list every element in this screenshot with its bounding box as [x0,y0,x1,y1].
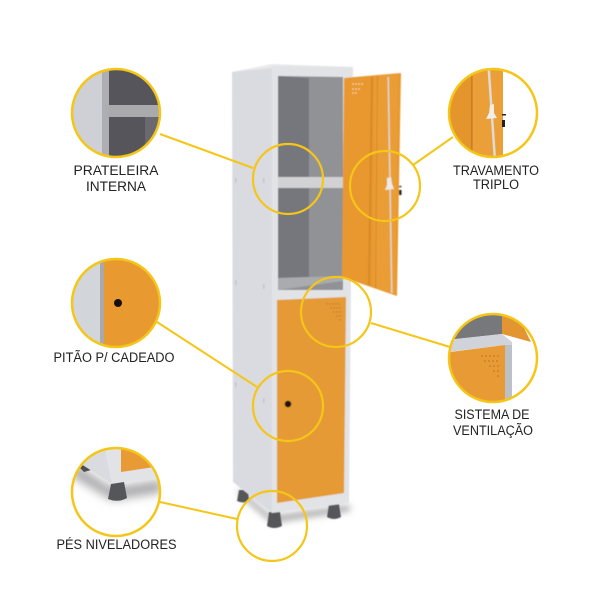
callout: pés niveladores [56,446,307,561]
side fastener marks [235,178,264,403]
label: SISTEMA DE [454,407,530,422]
cabinet top [232,64,353,76]
detail circle: shelf [73,70,159,156]
infographic canvas [54,64,538,562]
callout: prateleira interna [70,67,323,214]
marker circle on lock [350,151,420,221]
door vents [352,83,363,94]
label: PITÃO P/ CADEADO [54,350,174,365]
locker illustration [232,64,402,528]
open upper door [342,73,402,296]
lock tab [399,186,402,195]
marker circle on padlock hole [253,371,323,441]
padlock hole [285,401,291,407]
inner shelf [278,177,343,188]
floor shadow [238,488,350,523]
label line 2: VENTILAÇÃO [453,423,533,438]
locking rod [388,77,392,293]
label: PÉS NIVELADORES [56,537,176,552]
upper compartment interior [278,76,343,290]
connector line [371,323,450,347]
detail circle: lock [450,70,506,156]
cabinet side [232,68,272,513]
front left foot [267,512,282,528]
connector line [160,502,237,519]
label line 2: TRIPLO [473,177,519,192]
front right foot [327,504,341,519]
callout: pitão para cadeado [54,257,323,441]
connector line [160,134,253,168]
connector line [413,137,453,165]
callout: travamento triplo [350,69,543,221]
marker circle on shelf [253,144,323,214]
back left foot [237,490,249,502]
label: TRAVAMENTO [453,163,539,178]
connector line [157,322,257,387]
cabinet front [272,66,353,513]
door handle [385,177,394,190]
label: PRATELEIRA [74,163,158,178]
ventilation dots [326,303,341,321]
detail circle: feet [74,449,159,506]
marker circle on vents [301,277,371,347]
detail circle: ventilation [450,315,531,401]
lower door [277,297,346,503]
label line 2: INTERNA [86,179,146,194]
callout: sistema de ventilação [301,277,539,438]
marker circle on foot [237,491,307,561]
detail circle: padlock hole [73,260,159,346]
